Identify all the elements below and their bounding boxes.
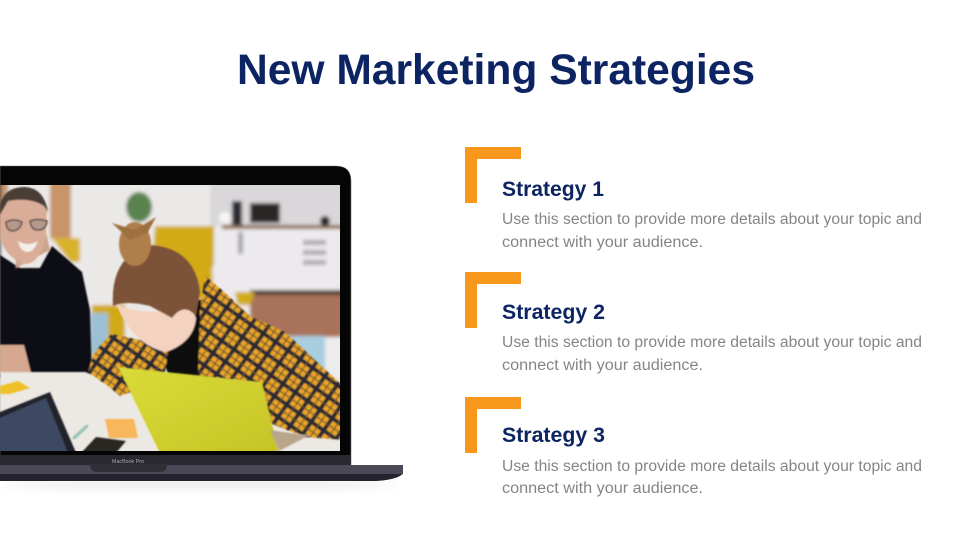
sticky notes [105,419,138,438]
yellow sofa [150,226,224,300]
trackpad notch [90,464,167,472]
orange corner bracket [465,397,521,453]
hair bun [119,222,151,266]
strategy 3 [465,397,922,497]
orange corner bracket [465,147,521,203]
glasses [6,220,47,231]
shelf items [232,201,242,225]
woman [88,217,345,440]
laptop brand label: MacBook Pro [112,459,144,465]
dark tablet [0,392,77,455]
hair [113,245,200,318]
plant [126,192,152,222]
phone [81,437,126,453]
blue chairs [90,313,108,353]
face [116,304,196,352]
description: Use this section to provide more details about your topic and [502,458,922,475]
smile [18,241,38,252]
laptop hinge band [0,455,351,465]
kitchen cabinet [210,224,226,263]
pen [74,426,87,438]
floor [250,292,345,337]
heading: Strategy 2 [502,301,605,324]
heading: Strategy 1 [502,178,604,201]
man's arm [0,345,31,373]
table [0,371,94,412]
laptop shadow [0,480,400,488]
laptop screen photo [0,180,345,455]
description: Use this section to provide more details about your topic and [502,211,922,228]
heading: Strategy 3 [502,424,605,447]
strategy 2: connect with your audience. [502,357,703,374]
orange corner bracket [465,272,521,328]
laptop mockup [0,166,403,488]
plaid shirt [88,334,168,396]
brick column [50,180,71,239]
strategy 2 [465,272,922,374]
strategy 1 [465,147,922,251]
laptop base [0,465,403,481]
man [0,187,92,378]
title: New Marketing Strategies [237,46,755,94]
laptop lid [0,166,351,466]
strategy 1: connect with your audience. [502,234,703,251]
yellow-green laptop [118,367,279,453]
description: Use this section to provide more details about your topic and [502,334,922,351]
strategy 3: connect with your audience. [502,480,703,497]
black shirt [160,300,215,380]
